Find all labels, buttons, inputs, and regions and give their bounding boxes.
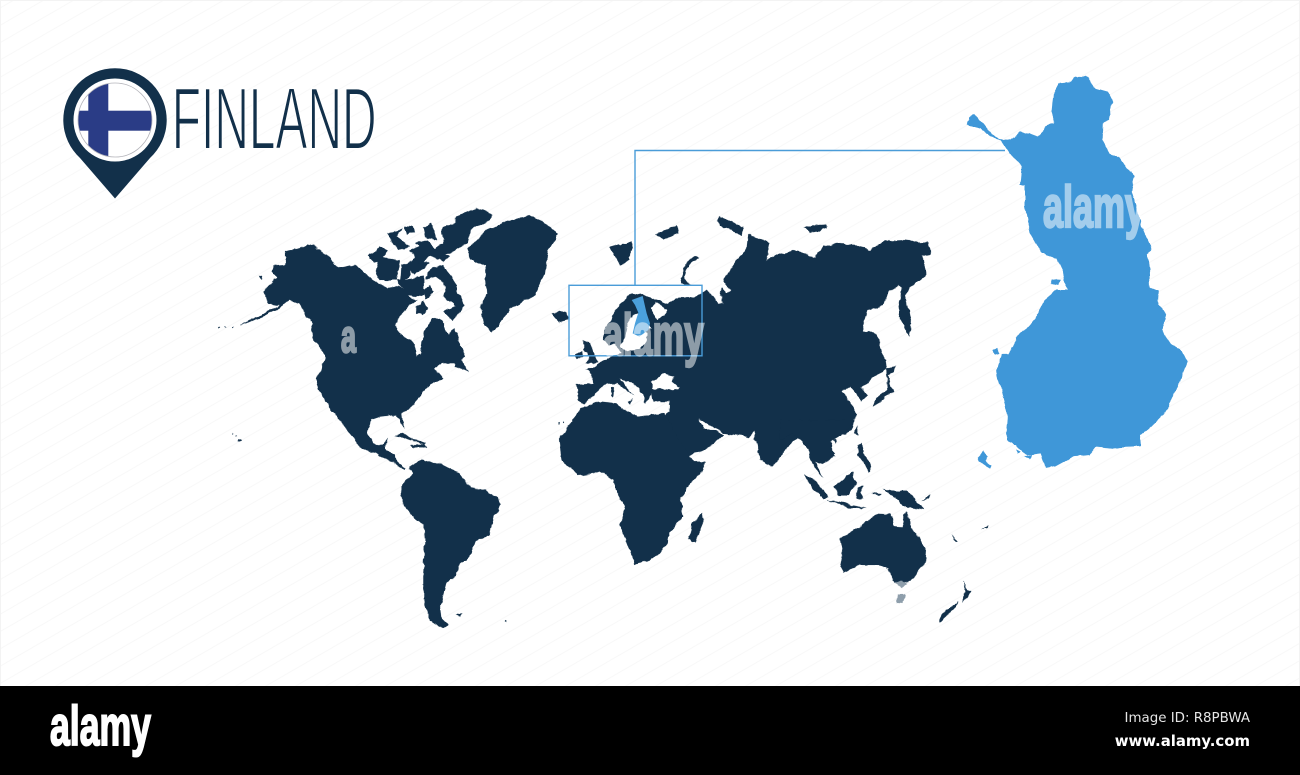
enlarged Finland map bbox=[967, 77, 1187, 468]
Southeast Asia and Oceania bbox=[780, 420, 988, 622]
image ID: Image ID: R8PBWA bbox=[1124, 711, 1251, 726]
Eurasia bbox=[552, 217, 930, 467]
location pin icon with Finnish flag bbox=[63, 68, 167, 199]
watermark text: a bbox=[341, 311, 357, 362]
title: FINLAND: FINLAND bbox=[172, 71, 377, 169]
watermark text bbox=[341, 175, 1145, 368]
South America and Africa bbox=[400, 402, 706, 628]
footer logo: alamy: alamy bbox=[50, 694, 151, 757]
watermark text: alamy bbox=[603, 303, 704, 368]
Finland highlighted on world map bbox=[632, 296, 650, 337]
world map bbox=[218, 208, 988, 628]
website URL: www.alamy.com bbox=[1115, 732, 1250, 750]
footer bar bbox=[0, 686, 1300, 775]
locator box and connector line bbox=[569, 150, 1005, 356]
watermark text: alamy bbox=[1043, 175, 1145, 240]
Greenland bbox=[468, 215, 558, 332]
North America bbox=[218, 208, 558, 470]
